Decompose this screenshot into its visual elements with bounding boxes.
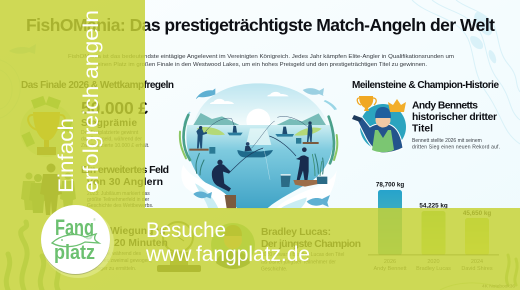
boats distant <box>227 133 294 137</box>
stat: weigh-in: Wettkampfes zweimal gewogen, <box>80 258 152 264</box>
decorative contour lines top right <box>0 0 520 144</box>
foreground waves <box>181 165 337 208</box>
bar chart: winning weights <box>368 182 499 272</box>
stat: extended field: Geschichte des Wettbewerbs. <box>87 203 153 209</box>
stat: weigh-in <box>75 226 168 272</box>
bar chart: winning weights: 2024 <box>471 259 483 265</box>
reeds <box>312 154 322 176</box>
bar chart: winning weights: David Shires <box>461 266 493 272</box>
stat: prize money <box>81 98 149 149</box>
fish left top <box>196 88 215 99</box>
bar chart: winning weights: 45,650 kg <box>463 210 491 217</box>
text: Andy Bennett milestone: Titel <box>412 124 433 134</box>
portrait: Andy Bennett with trophy <box>352 96 406 153</box>
text: Andy Bennett milestone: Bennett stellte 2026 mit seinem <box>412 138 482 144</box>
logo: fangplatz: Fang <box>55 215 94 240</box>
fish bottom right <box>307 195 330 207</box>
bar chart: winning weights: 2026 <box>384 259 396 265</box>
banks <box>197 127 322 136</box>
bar chart: winning weights: 78,700 kg <box>376 182 404 188</box>
call to action <box>145 219 310 266</box>
fish bottom left <box>193 191 212 199</box>
headline: Einfach erfolgreich angeln: Einfach <box>54 118 78 193</box>
call to action: www.fangplatz.de <box>145 243 310 266</box>
headline: Einfach erfolgreich angeln <box>54 10 103 193</box>
text: Andy Bennett milestone: dritten Sieg einen neuen Rekord auf. <box>412 144 500 150</box>
text: Bradley Lucas: Geschichte. <box>261 266 287 272</box>
text: Bradley Lucas: Bradley Lucas: <box>261 227 331 238</box>
stat: extended field: größte Teilnehmerfeld in der <box>87 197 149 203</box>
text: Bradley Lucas: 2020 gewann Bradley Lucas den Titel <box>261 252 344 258</box>
swooshes <box>183 100 337 125</box>
angler seated left <box>212 148 270 208</box>
title: FishOMania: Das prestigeträchtigste Match-Angeln der Welt <box>26 15 495 35</box>
buckets <box>281 175 327 187</box>
distant angler right <box>277 116 319 144</box>
text: Andy Bennett milestone: Andy Bennetts <box>412 100 478 112</box>
intro text <box>68 54 454 68</box>
heading: finale: Das Finale 2026 & Wettkampfregeln <box>21 80 174 91</box>
sun <box>246 109 270 133</box>
heading: milestones: Meilensteine & Champion-Historie <box>352 80 499 91</box>
text: Bradley Lucas: Der jüngste Champion <box>261 239 361 250</box>
stat: weigh-in: um den Sieger zu ermitteln. <box>75 266 136 272</box>
stat: prize money: Der Erstplatzierte gewinnt <box>81 130 139 136</box>
stat: prize money: Zweitplatzierte 10.000 £ erhält. <box>81 143 149 149</box>
bar chart: winning weights: 54,225 kg <box>419 202 448 210</box>
icon: clock and scale <box>157 222 201 272</box>
weeds <box>180 115 337 175</box>
sky <box>193 83 328 125</box>
stat: weigh-in: 20 Minuten <box>114 238 168 249</box>
stat: prize money: Siegprämie <box>81 118 137 129</box>
logo: fangplatz: ® <box>93 217 96 222</box>
stat: prize money: 50.000 £ <box>81 98 148 118</box>
intro text: FishOMania ist das bedeutendste eintägige Angelevent im Vereinigten Königreich. Jedes Jahr kämpfen Elite-Angler in Qualifikationsrunden um <box>68 54 454 60</box>
text: Andy Bennett milestone: historischer dritter <box>412 112 497 123</box>
portrait: Bradley Lucas <box>211 223 255 269</box>
water <box>186 125 333 208</box>
light on water <box>246 128 271 145</box>
call to action: Besuche <box>146 219 226 242</box>
illustration: anglers on the lake <box>180 83 337 208</box>
stat: extended field <box>81 164 169 209</box>
stat: prize money: das Preisgeld, während der <box>81 136 142 142</box>
headline: Einfach erfolgreich angeln: erfolgreich angeln <box>79 10 103 193</box>
bar chart: winning weights: Andy Bennett <box>373 266 407 272</box>
logo: fangplatz <box>41 205 114 278</box>
stat: weigh-in: Wiegung in <box>110 226 165 237</box>
text: Andy Bennett milestone <box>412 100 500 150</box>
fish right top <box>303 88 324 96</box>
credit: 4K Notebook36 <box>482 284 515 290</box>
stat: extended field: 2023: Jubiläum markiert das <box>87 191 150 197</box>
intro text: einen Platz im großen Finale in den Westwood Lakes, um ein hohes Preisgeld und den prestigeträchtigen Titel zu gewinnen. <box>97 62 428 68</box>
hills <box>193 113 327 127</box>
stat: extended field: Ein erweitertes Feld <box>81 164 169 176</box>
text: Bradley Lucas: als bisher jüngster Teilnehmer der <box>261 260 336 266</box>
icon: trophy with money <box>20 96 74 157</box>
icon: angler silhouettes <box>21 164 76 215</box>
bar chart: winning weights: 2020 <box>427 259 440 265</box>
clouds <box>210 92 289 104</box>
centre boat with angler <box>237 121 275 157</box>
angler standing right <box>269 136 325 187</box>
text: Bradley Lucas <box>261 227 361 272</box>
bar chart: winning weights: Bradley Lucas <box>416 266 451 272</box>
distant angler left <box>189 118 235 154</box>
logo: fangplatz: platz <box>54 242 95 264</box>
stat: extended field: von 30 Anglern <box>87 176 163 188</box>
stat: weigh-in: Die Fische, während des <box>86 251 142 257</box>
